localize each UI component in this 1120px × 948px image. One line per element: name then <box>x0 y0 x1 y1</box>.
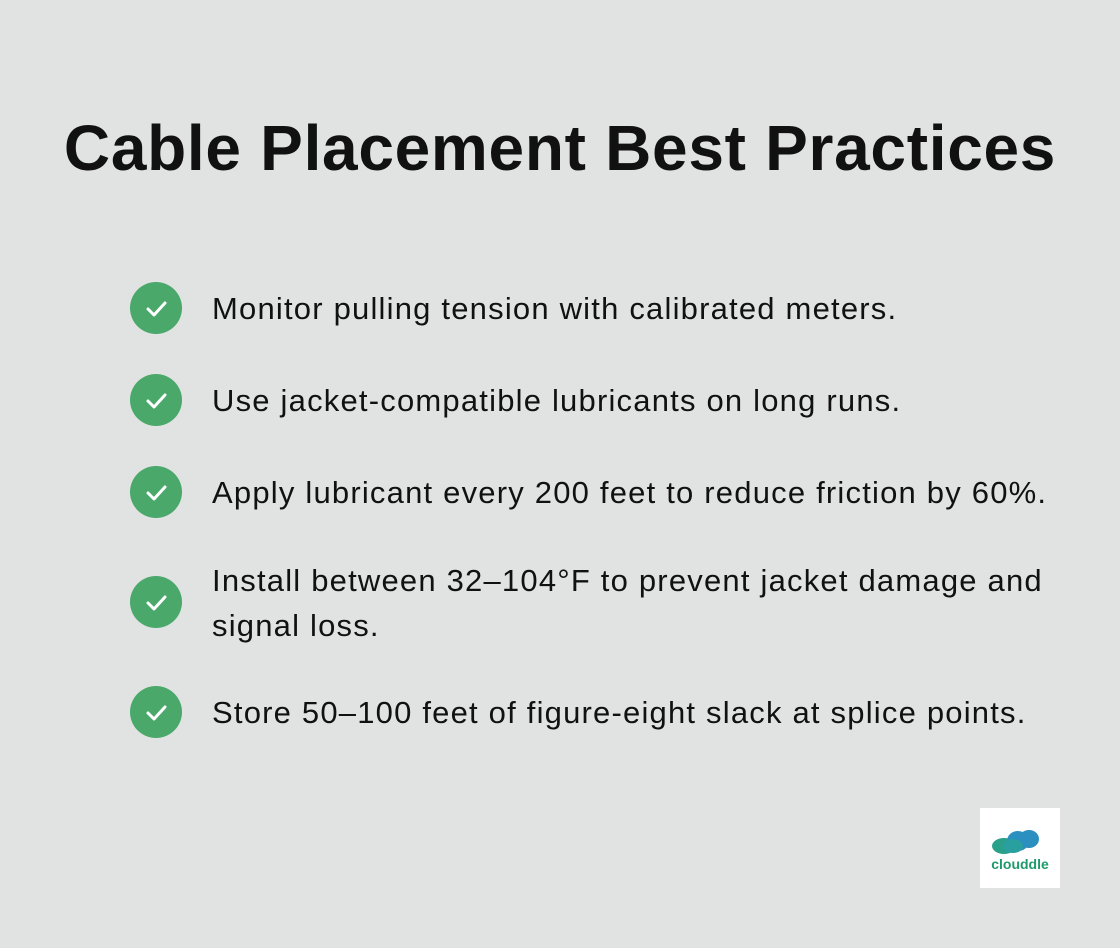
icon: check <box>130 686 182 738</box>
text: Use jacket-compatible lubricants on long runs. <box>212 383 901 418</box>
item 4 <box>130 563 1043 643</box>
text: Store 50–100 feet of figure-eight slack at splice points. <box>212 695 1027 730</box>
logo cloud <box>992 830 1039 854</box>
text: Monitor pulling tension with calibrated meters. <box>212 291 897 326</box>
icon: check <box>130 374 182 426</box>
item 1 <box>130 282 897 334</box>
title: Cable Placement Best Practices <box>64 112 1056 184</box>
item 3 <box>130 466 1047 518</box>
icon: check <box>130 576 182 628</box>
text: Install between 32–104°F to prevent jacket damage and <box>212 563 1043 598</box>
icon: check <box>130 282 182 334</box>
logo text: clouddle <box>991 856 1049 872</box>
text: signal loss. <box>212 608 380 643</box>
text <box>212 563 1043 643</box>
item 2 <box>130 374 901 426</box>
item 5 <box>130 686 1027 738</box>
logo <box>980 808 1060 888</box>
icon: check <box>130 466 182 518</box>
text: Apply lubricant every 200 feet to reduce friction by 60%. <box>212 475 1047 510</box>
